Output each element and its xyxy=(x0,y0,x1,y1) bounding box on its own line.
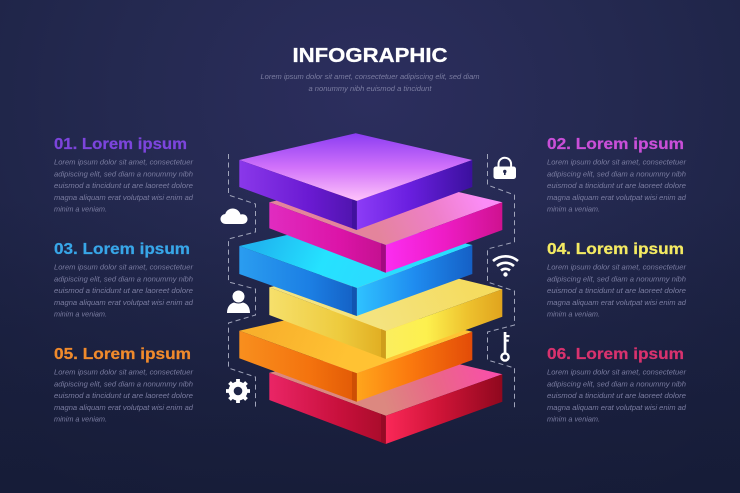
text block 01: euismod a tincidunt ut are laoreet dolore xyxy=(54,181,193,190)
text block 01: Lorem ipsum dolor sit amet, consectetuer xyxy=(54,158,194,166)
text block 01: adipiscing elit, sed diam a nonummy nibh xyxy=(54,169,193,178)
text block 05: adipiscing elit, sed diam a nonummy nibh xyxy=(54,379,193,388)
text block 03: Lorem ipsum dolor sit amet, consectetuer xyxy=(54,262,194,272)
text block 03 xyxy=(54,241,194,319)
text block 04: 04. Lorem ipsum xyxy=(547,241,684,258)
text block 06: adipiscing elit, sed diam a nonummy nibh xyxy=(547,379,686,388)
text block 02: 02. Lorem ipsum xyxy=(547,136,684,153)
text block 02: euismod a tincidunt ut are laoreet dolore xyxy=(547,181,686,190)
right dashed connector xyxy=(488,154,514,410)
text block 01: minim a veniam. xyxy=(54,205,107,214)
text block 05: 05. Lorem ipsum xyxy=(54,346,191,363)
text block 03: minim a veniam. xyxy=(54,310,107,319)
text block 03: 03. Lorem ipsum xyxy=(54,241,190,258)
text block 03: adipiscing elit, sed diam a nonummy nibh xyxy=(54,274,193,283)
text block 05: minim a veniam. xyxy=(54,415,107,424)
icon: key xyxy=(501,332,510,361)
text block 03: magna aliquam erat volutpat wisi enim ad xyxy=(54,298,194,307)
icon: wifi xyxy=(493,256,518,277)
3D layer stack xyxy=(239,133,502,444)
text block 06 xyxy=(547,346,687,424)
text block 06: magna aliquam erat volutpat wisi enim ad xyxy=(547,403,687,412)
text block 05: Lorem ipsum dolor sit amet, consectetuer xyxy=(54,368,194,376)
text block 04 xyxy=(547,241,687,319)
subtitle: a nonummy nibh euismod a tincidunt xyxy=(308,84,433,93)
text block 04: adipiscing elit, sed diam a nonummy nibh xyxy=(547,274,686,283)
text block 04: Lorem ipsum dolor sit amet, consectetuer xyxy=(547,262,687,272)
text block 04: euismod a tincidunt ut are laoreet dolore xyxy=(547,286,686,295)
icon: lock xyxy=(494,158,516,179)
text block 04: magna aliquam erat volutpat wisi enim ad xyxy=(547,298,687,307)
layer 2: magenta xyxy=(269,175,502,273)
icon: gear xyxy=(226,379,250,403)
text block 05: magna aliquam erat volutpat wisi enim ad xyxy=(54,403,194,412)
layer 1: purple xyxy=(239,133,472,230)
title: INFOGRAPHIC xyxy=(292,45,448,67)
text block 02 xyxy=(547,136,687,214)
text block 02: adipiscing elit, sed diam a nonummy nibh xyxy=(547,169,686,178)
icon: cloud xyxy=(220,208,248,224)
text block 02: Lorem ipsum dolor sit amet, consectetuer xyxy=(547,158,687,166)
text block 01: magna aliquam erat volutpat wisi enim ad xyxy=(54,193,194,202)
text block 03: euismod a tincidunt ut are laoreet dolore xyxy=(54,286,193,295)
layer 6: red xyxy=(269,347,502,444)
text block 05 xyxy=(54,346,194,424)
layer 3: blue xyxy=(239,219,472,316)
text block 02: magna aliquam erat volutpat wisi enim ad xyxy=(547,193,687,202)
text block 06: Lorem ipsum dolor sit amet, consectetuer xyxy=(547,368,687,376)
text block 04: minim a veniam. xyxy=(547,310,600,319)
text block 06: 06. Lorem ipsum xyxy=(547,346,684,363)
left dashed connector xyxy=(228,154,256,410)
text block 01: 01. Lorem ipsum xyxy=(54,136,187,153)
subtitle: Lorem ipsum dolor sit amet, consectetuer adipiscing elit, sed diam xyxy=(260,72,480,81)
text block 05: euismod a tincidunt ut are laoreet dolore xyxy=(54,391,193,400)
text block 01 xyxy=(54,136,194,214)
subtitle xyxy=(260,72,480,93)
icon: person xyxy=(227,290,250,313)
text block 06: euismod a tincidunt ut are laoreet dolore xyxy=(547,391,686,400)
text block 06: minim a veniam. xyxy=(547,415,600,424)
layer 4: yellow xyxy=(269,261,502,359)
layer 5: orange xyxy=(239,304,472,402)
text block 02: minim a veniam. xyxy=(547,205,600,214)
